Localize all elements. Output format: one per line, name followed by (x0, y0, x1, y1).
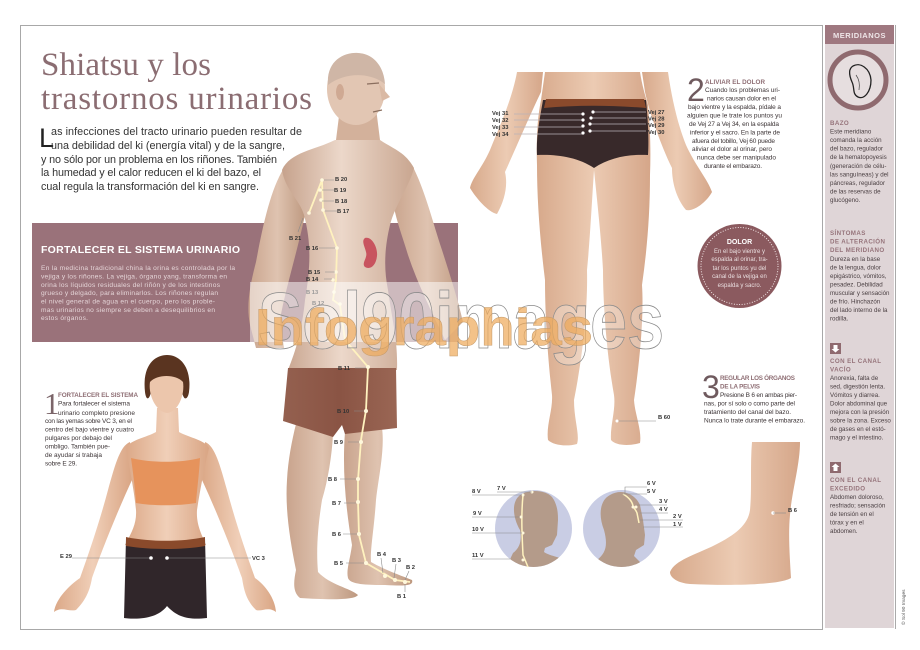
torso and legs (537, 72, 650, 445)
meridian labels: B 11 (338, 366, 351, 372)
bazo text (830, 120, 888, 204)
step 1 text: sobre E 29. (45, 460, 77, 468)
step 2 text: aliviar el dolor al orinar, pero (692, 146, 772, 153)
con el canal vacio text: VACÍO (830, 366, 851, 374)
con el canal excedido text: resfriado; sensación (830, 502, 886, 510)
meridian labels: B 4 (377, 552, 387, 558)
point lines (60, 554, 266, 562)
sintomas text: SÍNTOMAS (830, 229, 866, 237)
callout: dolor: tar los puntos yu del (713, 266, 766, 272)
con el canal excedido text (830, 477, 886, 535)
con el canal vacio text: sed, digestión lenta. (830, 384, 885, 390)
sintomas text: Dureza en la base (830, 256, 881, 263)
meridian labels: B 16 (306, 246, 319, 252)
callout: dolor: En el bajo vientre y (714, 249, 765, 255)
step 1 text (44, 386, 138, 468)
points and labels: B 60 (658, 415, 670, 421)
head back view circle: 10 V (472, 527, 484, 533)
head back view circle: 7 V (497, 486, 506, 492)
sidebar header (825, 25, 894, 44)
step 3 text (702, 369, 805, 424)
con el canal vacio text: Vómitos y diarrea. (830, 392, 880, 399)
meridian labels: B 13 (306, 290, 319, 296)
step 1 text: con las yemas sobre VC 3, en el (45, 418, 133, 425)
sintomas text: pesadez. Debilidad (830, 282, 883, 288)
panel body text: orina los líquidos residuales del riñón y de los intestinos (41, 282, 221, 289)
points and labels: Vej 30 (648, 130, 664, 136)
step 2 text: ALIVIAR EL DOLOR (705, 79, 765, 86)
male figure with spleen meridian (248, 53, 463, 600)
copyright: © Sol 90 Images (900, 589, 907, 625)
intro text: la humedad y el calor reducen el ki del bazo, el (41, 167, 261, 179)
step 2 text: Cuando los problemas uri- (705, 87, 780, 94)
meridian labels: B 3 (392, 558, 402, 564)
meridian labels: B 9 (334, 440, 344, 446)
con el canal vacio text: de gases en el estó- (830, 426, 886, 433)
waistband (126, 537, 205, 549)
bazo text: de las reservas de (830, 188, 881, 196)
step 3 text: tratamiento del canal del bazo. (704, 409, 791, 416)
panel body text: mas urinarios no siempre se deben a desequilibrios en (41, 307, 215, 314)
sintomas text: muscular y sensación (830, 290, 890, 297)
bazo text: las sanguíneas) y del (830, 172, 888, 178)
meridian labels: B 5 (334, 561, 344, 567)
torso (125, 408, 209, 545)
head side view circle: 6 V (647, 481, 656, 487)
step 2 text (687, 72, 782, 170)
step 3 text: REGULAR LOS ÓRGANOS (720, 373, 795, 382)
points and labels: Vej 27 (648, 110, 664, 116)
panel body text: En la medicina tradicional china la orina es controlada por la (41, 265, 235, 272)
meridian labels: B 2 (406, 565, 415, 571)
step 3 text: DE LA PELVIS (720, 384, 760, 390)
title (41, 47, 312, 117)
numeral 2: 2 (687, 72, 705, 108)
foot illustration (670, 442, 800, 585)
sintomas text: rodilla. (830, 316, 849, 322)
bazo text: del bazo, regulador (830, 146, 883, 152)
icon: up arrow (830, 462, 841, 473)
back figure (470, 72, 712, 445)
step 2 text: durante el embarazo. (704, 163, 762, 170)
callout: dolor: DOLOR (727, 239, 752, 246)
bazo text: páncreas, regulador (830, 180, 885, 187)
intro text: as infecciones del tracto urinario pueden resultar de (51, 126, 302, 138)
step 2 text: bajo vientre y la espalda, pídale a (688, 104, 781, 111)
left leg (287, 424, 358, 599)
female figure front (54, 355, 276, 619)
sintomas text (830, 229, 890, 322)
waistband (544, 99, 646, 108)
bandeau top (131, 458, 200, 505)
right leg (344, 428, 412, 585)
meridian labels: B 8 (328, 477, 338, 483)
head back view circle: 11 V (472, 553, 484, 559)
viewer-right arm (392, 165, 463, 340)
head side view circle: 1 V (673, 522, 682, 528)
callout: dolor: espalda al orinar, tra- (711, 257, 768, 263)
title: trastornos urinarios (41, 81, 312, 117)
arms (54, 442, 132, 612)
meridian labels: B 10 (337, 409, 349, 415)
points and labels: Vej 29 (648, 123, 665, 129)
step 2 text: inferior y el sacro. En la parte de (690, 130, 780, 136)
icon: kidney in ring (830, 52, 886, 108)
intro text (39, 123, 302, 193)
points and labels: Vej 31 (492, 111, 509, 117)
con el canal vacio text: Anorexia, falta de (830, 375, 879, 382)
panel body text (41, 265, 235, 322)
step 1 text: Para fortalecer el sistema (58, 400, 130, 408)
points and labels: Vej 34 (492, 132, 509, 138)
arms (470, 72, 543, 214)
meridian labels: B 7 (332, 501, 341, 507)
watermark: Infographias (255, 299, 593, 357)
con el canal excedido text: Abdomen doloroso, (830, 494, 884, 501)
con el canal vacio text (830, 358, 891, 442)
con el canal vacio text: CON EL CANAL (830, 358, 881, 365)
torso (282, 140, 414, 370)
head side view circle (583, 481, 683, 570)
sidebar header: MERIDIANOS (833, 31, 886, 40)
head (327, 53, 390, 125)
step 2 text: afuera del tobillo, Vej 60 puede (692, 138, 775, 145)
sintomas text: de la lengua, dolor (830, 264, 881, 272)
con el canal excedido text: CON EL CANAL (830, 477, 881, 484)
panel body text: estos órganos. (41, 315, 88, 322)
con el canal vacio text: sobre la zona. Exceso (830, 418, 891, 424)
bazo text: de la hematopoyesis (830, 154, 887, 161)
con el canal vacio text: mago y el intestino. (830, 434, 884, 442)
meridian labels: B 14 (306, 277, 319, 283)
meridian labels: B 15 (308, 270, 321, 276)
step 2 text: de Vej 27 a Vej 34, en la espalda (689, 121, 779, 128)
step 1 text: pulgares por debajo del (45, 435, 113, 442)
step 3 text: Presione B 6 en ambas pier- (720, 392, 797, 399)
meridian labels: B 18 (335, 199, 348, 205)
sintomas text: DE ALTERACIÓN (830, 238, 886, 246)
step 3 text: nas, por sí solo o como parte del (704, 400, 796, 408)
sintomas text: epigástrico, vómitos, (830, 273, 887, 280)
points and labels: Vej 32 (492, 118, 508, 124)
step 1 text: centro del bajo vientre y cuatro (45, 426, 134, 434)
step 1 text: FORTALECER EL SISTEMA (58, 392, 138, 399)
step 1 text: urinario completo presione (58, 410, 135, 417)
panel heading: FORTALECER EL SISTEMA URINARIO (41, 244, 240, 256)
bazo text: (generación de célu- (830, 163, 886, 170)
intro text: cual regula la transformación del ki en sangre. (41, 181, 259, 193)
meridian labels: B 20 (335, 177, 347, 183)
watermark: Sol90images (258, 276, 664, 365)
kidney (363, 238, 377, 268)
sintomas text: del lado interno de la (830, 307, 888, 314)
point lines: E 29 (60, 554, 73, 560)
drop cap L: L (39, 123, 54, 153)
meridian labels: B 12 (312, 301, 324, 307)
head back view circle: 9 V (473, 511, 482, 517)
meridian line (309, 180, 410, 582)
panel body text: el nivel general de agua en el cuerpo, pero los proble- (41, 298, 215, 306)
point lines: VC 3 (252, 556, 266, 562)
step 3 text: Nunca lo trate durante el embarazo. (704, 418, 805, 424)
icon: down arrow (830, 343, 841, 354)
meridian labels: B 6 (332, 532, 342, 538)
step 1 text: de ayudar si trabaja (45, 452, 102, 459)
intro text: y no sólo por un problema en los riñones. También (41, 154, 277, 166)
head side view circle: 2 V (673, 514, 682, 520)
head back view circle: 8 V (472, 489, 481, 495)
meridian labels: B 21 (289, 236, 302, 242)
bazo text: Este meridiano (830, 128, 872, 136)
meridian labels: B 19 (334, 188, 347, 194)
con el canal excedido text: abdomen. (830, 528, 858, 535)
neck (335, 108, 381, 148)
step 2 text: nunca debe ser manipulado (697, 154, 776, 162)
panel body text: grueso y delgado, para eliminarlos. Los riñones regulan (41, 290, 218, 297)
callout: dolor (698, 224, 782, 308)
hair (145, 355, 189, 398)
bazo text: glucógeno. (830, 197, 861, 204)
title: Shiatsu y los (41, 47, 211, 83)
bazo text: comanda la acción (830, 137, 882, 144)
meridian labels: B 1 (397, 594, 407, 600)
callout: dolor: espalda y sacro. (718, 283, 762, 289)
con el canal vacio text: mejora con la presión (830, 409, 890, 416)
head back view circle (472, 486, 572, 570)
viewer-left arm (248, 168, 306, 348)
con el canal excedido text: tórax y en el (830, 520, 864, 526)
bazo text: BAZO (830, 120, 849, 127)
sidebar: meridianos (825, 25, 896, 629)
con el canal vacio text: Dolor abdominal que (830, 400, 888, 408)
head side view circle: 4 V (659, 507, 668, 513)
con el canal excedido text: EXCEDIDO (830, 486, 866, 492)
points and labels: Vej 33 (492, 125, 509, 131)
numeral 1: 1 (44, 386, 60, 421)
face (150, 376, 183, 413)
step 2 text: alguien que le trate los puntos yu (687, 112, 782, 120)
step 2 text: narios causan dolor en el (707, 96, 777, 102)
meridian points (307, 178, 407, 584)
con el canal excedido text: de tensión en el (830, 511, 874, 518)
shorts (124, 538, 207, 619)
head side view circle: 3 V (659, 499, 668, 505)
sintomas text: de frío. Hinchazón (830, 298, 881, 306)
step 1 text: ombligo. También pue- (45, 444, 110, 450)
intro text: una debilidad del ki (energía vital) y de la sangre, (51, 140, 285, 152)
panel body text: vejiga y los riñones. La vejiga, órgano yang, transforma en (41, 274, 227, 280)
points and labels: Vej 28 (648, 116, 665, 122)
sintomas text: DEL MERIDIANO (830, 247, 885, 254)
callout: dolor: canal de la vejiga en (712, 274, 767, 280)
meridian labels (289, 177, 415, 600)
foot illustration: B 6 (788, 508, 798, 514)
shorts (283, 368, 397, 437)
brief (537, 100, 648, 168)
numeral 3: 3 (702, 369, 720, 405)
head side view circle: 5 V (647, 489, 656, 495)
panel: fortalecer el sistema urinario (32, 223, 458, 342)
points and labels (492, 110, 670, 422)
meridian labels: B 17 (337, 209, 349, 215)
